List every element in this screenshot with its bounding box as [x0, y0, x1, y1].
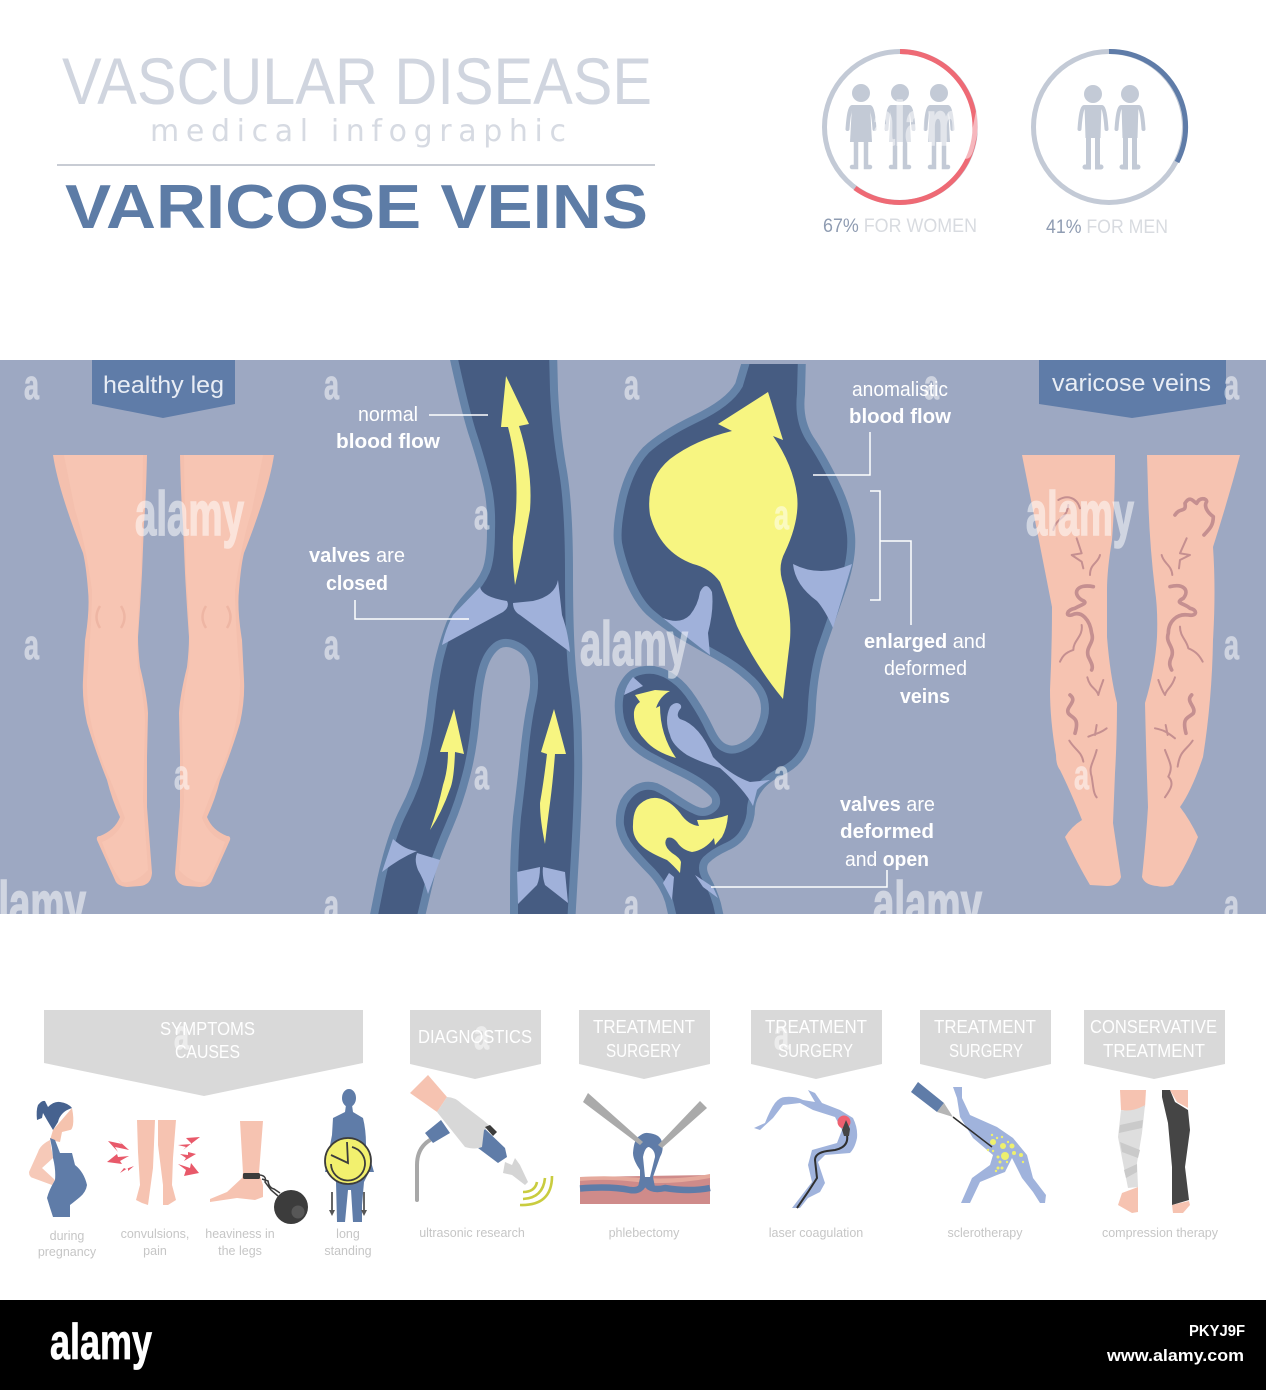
banner: treatment surgery 2: TREATMENT: [765, 1017, 867, 1037]
watermark: a: [1224, 361, 1239, 408]
caption: long standing: long: [336, 1227, 360, 1241]
banner: conservative treatment: CONSERVATIVE: [1090, 1017, 1217, 1037]
callout: valves are closed: valves are: [309, 545, 405, 567]
illustration: varicose legs: [1022, 455, 1240, 887]
label tab: varicose veins: [1039, 360, 1226, 418]
icon: women: [848, 84, 952, 167]
label tab: healthy leg: healthy leg: [103, 372, 224, 399]
watermark: a: [624, 361, 639, 408]
icon: phlebectomy: [580, 1093, 710, 1204]
arrow: anomalous flow lower: [633, 798, 728, 873]
callout: enlarged and deformed veins: [864, 491, 986, 708]
icon: sclerotherapy: [911, 1082, 1046, 1203]
callout: normal blood flow: blood flow: [336, 431, 440, 453]
watermark: a: [474, 491, 489, 538]
icon: pregnant woman: [29, 1101, 87, 1217]
heading: varicose veins: VARICOSE VEINS: [65, 173, 648, 242]
watermark: a: [174, 751, 189, 798]
stat: 41% for men: [1034, 51, 1186, 238]
diagram: deformed vein: [618, 355, 852, 922]
icon: compression therapy: [1118, 1090, 1190, 1213]
callout: enlarged and deformed veins: enlarged and: [864, 631, 986, 653]
banner: diagnostics: [410, 1010, 541, 1079]
icon: standing person with clock: [325, 1089, 374, 1222]
banner: symptoms causes: CAUSES: [175, 1042, 240, 1062]
watermark: alamy: [135, 480, 244, 549]
watermark: a: [324, 621, 339, 668]
callout: enlarged and deformed veins: veins: [900, 686, 950, 708]
stat: 67% for women: [823, 52, 982, 237]
illustration: healthy legs: [53, 455, 274, 887]
watermark: a: [924, 361, 939, 408]
veins: varicose lines: [1053, 497, 1213, 797]
watermark: a: [1224, 621, 1239, 668]
watermark: a: [774, 491, 789, 538]
watermark: alamy: [580, 610, 688, 679]
icon: ultrasound probe: [410, 1075, 552, 1205]
banner: treatment surgery 2: [751, 1010, 882, 1079]
title: vascular disease: VASCULAR DISEASE: [62, 44, 652, 118]
banner: diagnostics: DIAGNOSTICS: [418, 1027, 532, 1047]
watermark: a: [1074, 751, 1089, 798]
caption: during pregnancy: pregnancy: [38, 1245, 97, 1259]
caption: heaviness in the legs: the legs: [218, 1244, 262, 1258]
banner: conservative treatment: [1084, 1010, 1225, 1079]
caption: during pregnancy: during: [50, 1229, 84, 1243]
diagram: normal vein: [372, 350, 578, 925]
banner: conservative treatment: TREATMENT: [1103, 1041, 1205, 1061]
caption: long standing: standing: [324, 1244, 372, 1258]
caption: sclerotherapy: sclerotherapy: [947, 1226, 1023, 1240]
arrow: main flow: [501, 376, 531, 585]
watermark: a: [324, 361, 339, 408]
callout: normal blood flow: [336, 404, 488, 453]
caption: laser coagulation: laser coagulation: [769, 1226, 863, 1240]
callout: anomalistic blood flow: blood flow: [849, 406, 951, 428]
banner: treatment surgery 3: [920, 1010, 1051, 1079]
banner: treatment surgery 2: a: [774, 1011, 789, 1058]
subtitle: medical infographic: medical infographic: [150, 114, 566, 149]
watermark: alamy: [1026, 480, 1134, 549]
label: 41% for men: 41% FOR MEN: [1046, 217, 1168, 238]
banner: symptoms causes: [44, 1010, 363, 1096]
label: 67% for women: 67% FOR WOMEN: [823, 216, 977, 237]
label tab: varicose veins: varicose veins: [1052, 370, 1211, 397]
watermark: a: [474, 751, 489, 798]
banner: treatment surgery 1: TREATMENT: [593, 1017, 695, 1037]
watermark over circle: alamy: [873, 90, 982, 159]
watermark: alamy: [873, 870, 982, 939]
banner: symptoms causes: a: [174, 1011, 189, 1058]
watermark: a: [324, 881, 339, 928]
footer image id: PKYJ9F: [1189, 1323, 1245, 1340]
callout: anomalistic blood flow: [813, 379, 951, 475]
icon: laser coagulation: [754, 1090, 857, 1208]
caption: ultrasonic research: ultrasonic research: [419, 1226, 525, 1240]
arrow: left branch flow: [430, 709, 464, 830]
caption: heaviness in the legs: heaviness in: [205, 1227, 275, 1241]
watermark: a: [24, 361, 39, 408]
footer bar: [0, 1300, 1266, 1390]
caption: phlebectomy: phlebectomy: [609, 1226, 680, 1240]
arrow: anomalous flow large: [649, 392, 798, 699]
icon: leg with ball and chain: [210, 1121, 308, 1224]
callout: valves are closed: closed: [326, 573, 388, 595]
caption: convulsions pain: pain: [143, 1244, 167, 1258]
caption: compression therapy: compression therapy: [1102, 1226, 1219, 1240]
watermark: a: [1224, 881, 1239, 928]
footer logo: alamy: alamy: [50, 1314, 152, 1370]
watermark: [0, 361, 1239, 939]
label tab: healthy leg: [92, 360, 235, 418]
banner: treatment surgery 2: SURGERY: [778, 1041, 853, 1061]
arrow: anomalous flow middle: [634, 690, 676, 758]
banner: symptoms causes: SYMPTOMS: [160, 1019, 255, 1039]
icon: men: [1080, 85, 1144, 167]
footer url: www.alamy.com: [1106, 1346, 1244, 1365]
caption: convulsions pain: convulsions,: [121, 1227, 189, 1241]
callout: valves are closed: [309, 545, 469, 619]
banner: treatment surgery 3: SURGERY: [949, 1041, 1023, 1061]
callout: normal blood flow: normal: [358, 404, 418, 426]
arrow: right branch flow: [540, 709, 566, 844]
banner: diagnostics: a: [474, 1011, 489, 1058]
watermark: a: [774, 751, 789, 798]
banner: treatment surgery 1: SURGERY: [606, 1041, 681, 1061]
panel: leg comparison: [0, 350, 1266, 939]
callout: valves are deformed and open: and open: [845, 849, 929, 871]
banner: treatment surgery 1: [579, 1010, 710, 1079]
banner: treatment surgery 3: TREATMENT: [934, 1017, 1036, 1037]
callout: anomalistic blood flow: anomalistic: [852, 379, 948, 401]
icon: leg pain: [107, 1120, 200, 1205]
callout: enlarged and deformed veins: deformed: [884, 658, 967, 680]
callout: valves are deformed and open: valves are: [840, 794, 935, 816]
watermark: a: [24, 621, 39, 668]
callout: valves are deformed and open: deformed: [840, 821, 934, 843]
callout: valves are deformed and open: [711, 794, 935, 887]
watermark: a: [624, 881, 639, 928]
